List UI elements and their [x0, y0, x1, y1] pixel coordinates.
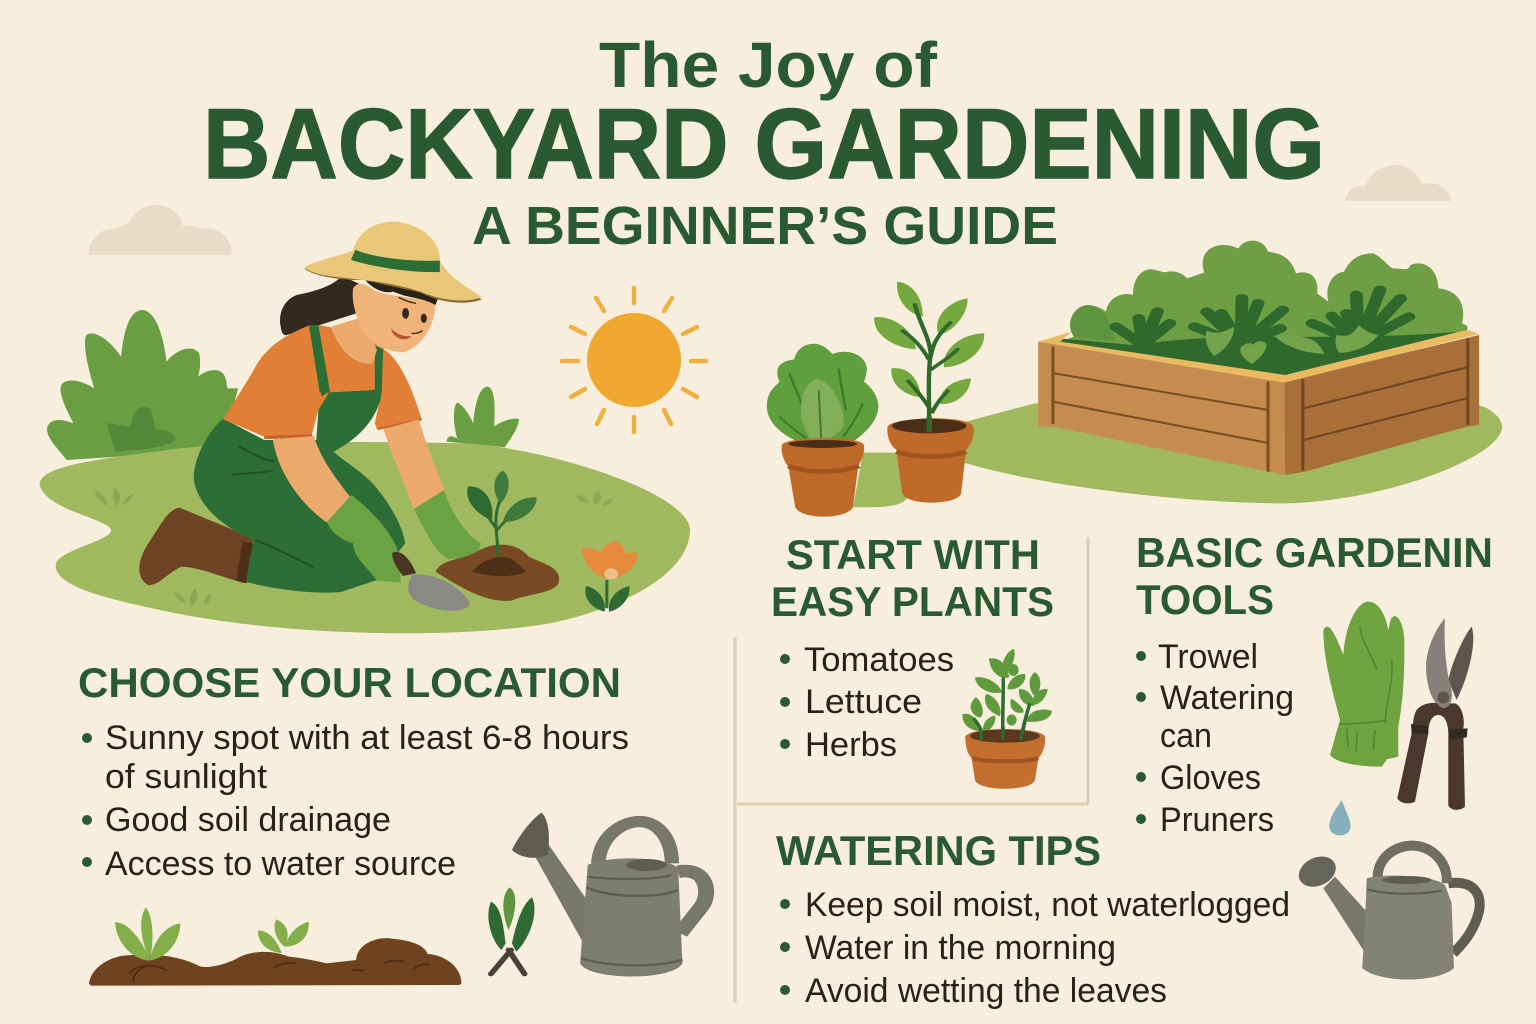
hat: [305, 222, 482, 303]
hair: [280, 276, 373, 335]
bullet list: [780, 641, 954, 764]
heading: [771, 531, 1054, 625]
title block: [203, 29, 1325, 256]
heading: EASY PLANTS: [771, 578, 1054, 625]
title line: Backyard Gardening: BACKYARD GARDENING: [203, 88, 1325, 199]
icon: gloves: [1323, 602, 1404, 767]
bullet list: Avoid wetting the leaves: [805, 972, 1167, 1010]
illustration: soil, sprouts, small pruners, watering can: [89, 813, 706, 986]
arms: [273, 419, 445, 523]
bullet list: Lettuce: [805, 683, 922, 721]
bullet list: [780, 886, 1290, 1010]
soil bed: [89, 938, 461, 986]
soil mound: [436, 545, 559, 601]
sapling: [467, 471, 537, 557]
raised bed foliage: [1054, 241, 1468, 377]
shirt: [223, 325, 422, 439]
raised bed front wall: [1038, 342, 1285, 475]
heart leaves: [1206, 325, 1378, 364]
bullet list: [1136, 638, 1294, 839]
bullet list: Pruners: [1160, 801, 1274, 839]
grass mound: [40, 442, 690, 633]
small bush right: [446, 387, 519, 447]
section dividers: [735, 537, 1088, 1003]
bullet list: Keep soil moist, not waterlogged: [805, 886, 1290, 924]
title line: The Joy of: The Joy of: [599, 29, 938, 101]
heading: WATERING TIPS: [776, 827, 1101, 874]
icon: sun: [562, 288, 706, 432]
neck: [331, 317, 377, 364]
bullet list: Watering: [1160, 679, 1294, 717]
heading: START WITH: [786, 531, 1040, 578]
clay pot lettuce: [767, 344, 878, 517]
raised bed right wall: [1284, 335, 1479, 475]
bullet list: Tomatoes: [804, 641, 954, 679]
illustration: pots and raised bed: [767, 241, 1502, 517]
bullet list: Trowel: [1158, 638, 1258, 676]
clay pot herb: [874, 282, 984, 503]
right glove: [414, 490, 481, 559]
overalls bib: [309, 325, 383, 452]
raised bed soil and dark leaves: [1059, 290, 1459, 377]
grass tufts: [95, 488, 613, 607]
small pruners: [488, 887, 534, 974]
bullet list: Herbs: [805, 726, 897, 764]
flower: [582, 541, 638, 612]
bush left: [47, 310, 238, 460]
section: choose your location: [78, 659, 629, 883]
left glove: [327, 495, 401, 583]
sprouts: [115, 907, 309, 961]
face: [353, 278, 440, 352]
bullet list: Good soil drainage: [105, 801, 391, 839]
section: basic gardening tools: [1136, 529, 1493, 839]
icon: watering can: [1294, 846, 1480, 980]
section: start with easy plants: [771, 531, 1054, 764]
bullet list: Gloves: [1160, 759, 1261, 797]
grass patch: [853, 403, 1502, 507]
bullet list: Water in the morning: [805, 929, 1116, 967]
trowel: [392, 552, 470, 611]
illustration: gardener scene: [40, 222, 690, 633]
heading: CHOOSE YOUR LOCATION: [78, 659, 621, 706]
subtitle: A BEGINNER’S GUIDE: [472, 196, 1058, 256]
bullet list: Sunny spot with at least 6-8 hours: [105, 719, 629, 757]
icon: water drop: [1329, 800, 1351, 835]
bullet list: of sunlight: [105, 758, 268, 796]
large watering can: [512, 813, 706, 976]
boot: [139, 508, 253, 585]
cloud right: [1345, 165, 1451, 201]
illustration: gloves, pruners, drop, watering can: [1294, 602, 1480, 980]
icon: potted herb: [963, 650, 1051, 789]
icon: pruners: [1397, 618, 1473, 810]
cloud left: [88, 205, 232, 255]
bullet list: [82, 719, 629, 883]
heading: [1136, 529, 1493, 623]
section: watering tips: [776, 827, 1290, 1010]
heading: BASIC GARDENIN: [1136, 529, 1493, 576]
bullet list: can: [1160, 717, 1212, 755]
overalls: [194, 325, 405, 593]
raised bed rim: [1038, 330, 1479, 383]
heading: TOOLS: [1136, 576, 1274, 623]
bullet list: Access to water source: [105, 845, 456, 883]
